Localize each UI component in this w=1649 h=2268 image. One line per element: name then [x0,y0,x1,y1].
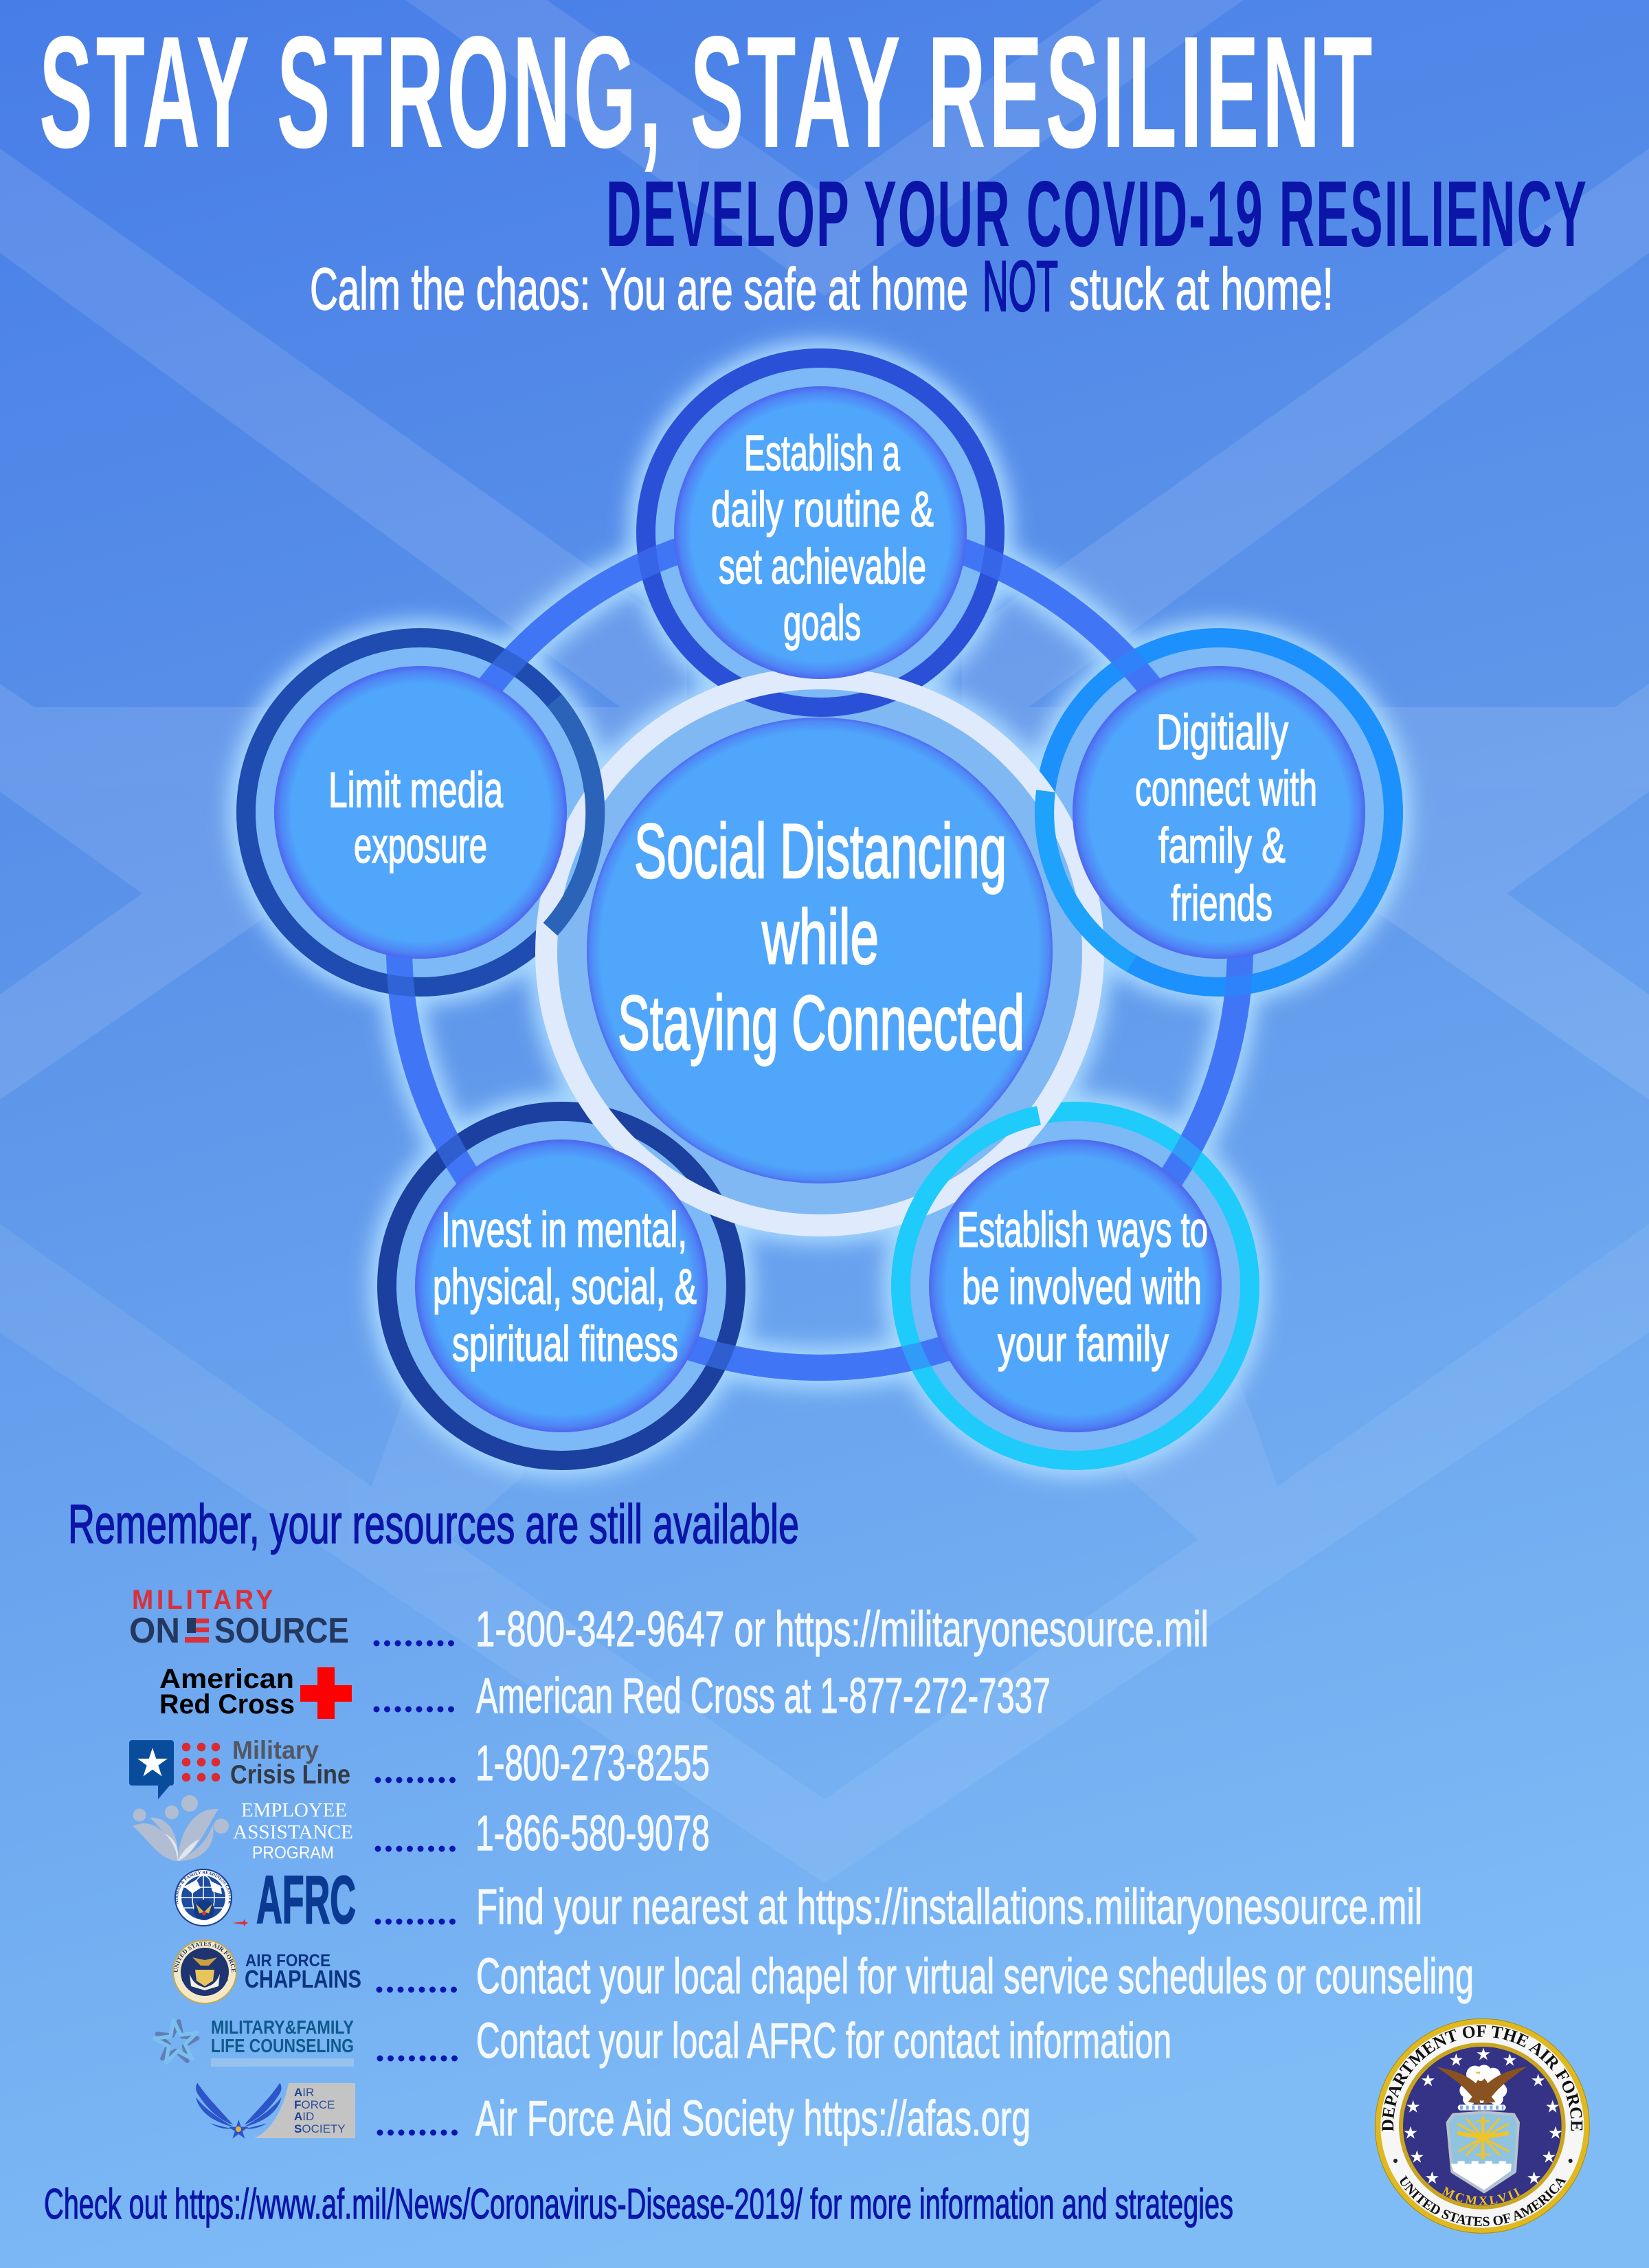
logo: Air Force Chaplains: CHAPLAINS [245,1965,361,1993]
node: limit media: exposure [354,819,487,874]
logo: Air Force Aid Society: SOCIETY [294,2122,346,2135]
seal: Department of the Air Force: DEPARTMENT OF THE AIR FORCE [1382,2025,1583,2132]
node: daily routine: daily routine & [711,482,934,537]
node: daily routine: goals [783,596,861,651]
seal: Department of the Air Force: MCMXLVII [1442,2186,1521,2205]
seal: Department of the Air Force: UNITED STATES OF AMERICA [1400,2175,1567,2227]
logo: Military and Family Life Counseling: MILITARY&FAMILY [211,2016,354,2038]
node: digitally connect: friends [1171,876,1272,931]
resource lines: American Red Cross at 1-877-272-7337 [476,1669,1051,1724]
logo: Employee Assistance Program: PROGRAM [252,1843,334,1863]
seal: Department of the Air Force [1374,2018,1590,2234]
logo: Military Crisis Line [129,1736,350,1799]
resource lines: Air Force Aid Society https://afas.org [475,2091,1031,2146]
logo: Air Force Chaplains: CHAPLAIN CORPS [181,1979,228,1982]
logo: Air Force Aid Society: FORCE [294,2098,335,2111]
logo: Military Crisis Line: Military [232,1736,319,1764]
logo: Air Force Aid Society: AIR [294,2086,314,2099]
node: daily routine: set achievable [719,540,926,594]
logo: Air Force Aid Society [196,2083,355,2139]
node: fitness [415,1139,708,1432]
node: digitally connect: connect with [1135,761,1317,816]
resources heading: Remember, your resources are still available [68,1493,799,1555]
node: family: Establish ways to [957,1203,1208,1258]
logo: American Red Cross [159,1664,352,1720]
logo: AFRC [175,1862,356,1937]
logo: Military Crisis Line: Crisis Line [230,1760,350,1790]
tagline: Calm the chaos: You are safe at home [310,256,968,322]
logo: American Red Cross: Red Cross [159,1689,295,1720]
tagline: stuck at home! [1069,256,1334,322]
logo: Military and Family Life Counseling [152,2016,354,2067]
logo: Air Force Chaplains: AIR FORCE [245,1951,330,1970]
node: limit media [274,666,567,959]
logo: Employee Assistance Program: EMPLOYEE [241,1800,347,1821]
node: family: your family [998,1317,1169,1372]
resource lines [475,1602,1474,2146]
logo: Military OneSource: MILITARY [132,1585,276,1615]
diagram: resilience cycle [228,340,1411,1478]
logo: Military OneSource: SOURCE [214,1611,349,1651]
logo: Military OneSource [129,1585,349,1651]
logo: Air Force Chaplains: UNITED STATES AIR FORCE [174,1942,236,1972]
resource lines: 1-800-342-9647 or https://militaryonesource.mil [475,1602,1209,1657]
node: family [929,1139,1222,1432]
node: fitness: physical, social, & [433,1260,697,1315]
node: family: be involved with [962,1260,1202,1315]
logo: Military OneSource: ON [129,1611,180,1651]
logo: Employee Assistance Program: ASSISTANCE [233,1822,353,1843]
logo: Air Force Chaplains [172,1939,361,2004]
resource lines: 1-866-580-9078 [475,1806,710,1861]
node: daily routine: Establish a [744,426,901,481]
center circle [587,718,1053,1183]
node: fitness: Invest in mental, [441,1203,687,1258]
resource lines: Contact your local AFRC for contact information [476,2014,1171,2069]
node: digitally connect: Digitially [1156,705,1288,760]
center circle: while [761,894,879,980]
logo: Military and Family Life Counseling: LIFE COUNSELING [211,2035,354,2056]
node: fitness: spiritual fitness [452,1317,678,1372]
tagline: NOT [983,247,1058,326]
leader dots [377,1643,455,2133]
center circle: Social Distancing [634,808,1007,894]
logo: Employee Assistance Program [133,1795,353,1863]
node: digitally connect: family & [1158,819,1286,874]
center circle: Staying Connected [618,980,1024,1066]
logo: American Red Cross: American [159,1664,294,1694]
node: limit media: Limit media [328,763,504,818]
logo: AFRC: AIRMAN & FAMILY READINESS CENTER [175,1871,232,1904]
node: daily routine [674,386,967,679]
node: digitally connect [1073,666,1365,959]
logo: Air Force Aid Society: AID [294,2110,314,2123]
logo: AFRC: AFRC [256,1862,356,1937]
resource lines: 1-800-273-8255 [475,1736,710,1791]
